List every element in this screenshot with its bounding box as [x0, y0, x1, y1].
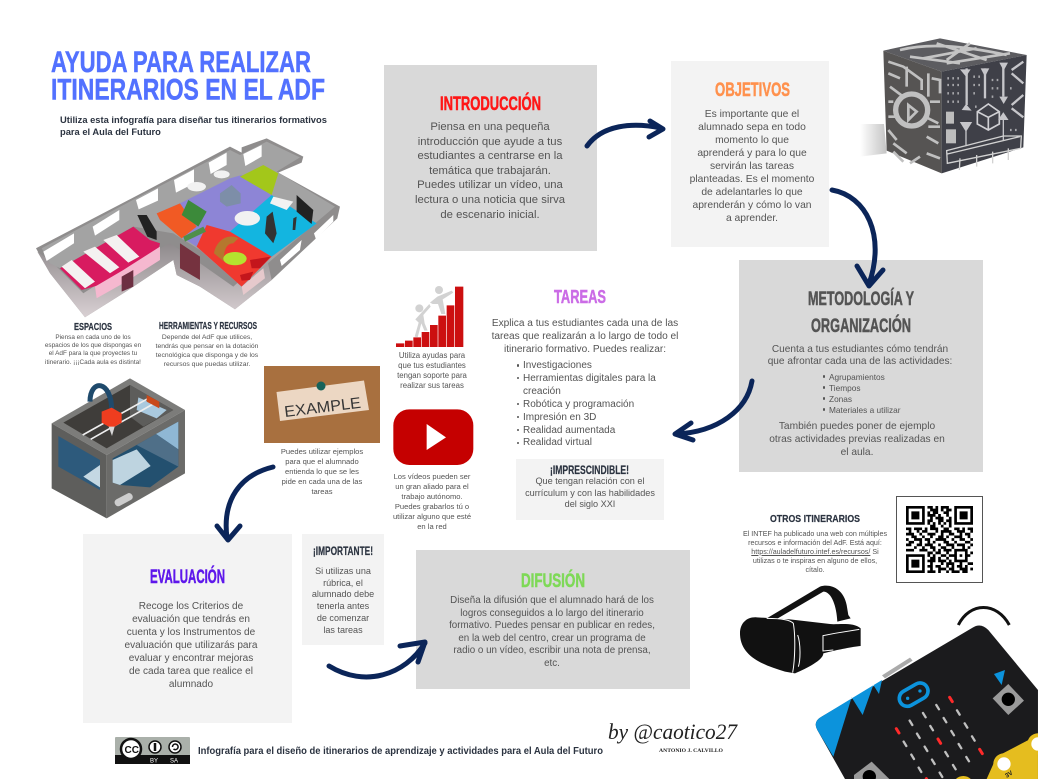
panel: introducción — [384, 65, 597, 251]
text: importante: de comenzar — [317, 613, 369, 623]
illustration: 3D printer — [52, 378, 185, 518]
text: puedes utilizar ejemplos: entienda lo que se les — [285, 467, 359, 476]
text: objetivos — [690, 108, 814, 224]
signature: by @caotico27 — [608, 719, 738, 744]
text: importante: rúbrica, el — [323, 578, 363, 588]
illustration: aula del futuro floor plan — [36, 138, 340, 317]
text: objetivos: de adelantarles lo que — [701, 187, 803, 198]
qr code — [896, 496, 982, 582]
text: tareas intro: itinerario formativo. Puedes realizar: — [504, 344, 666, 354]
text: utiliza ayudas: Utiliza ayudas para — [399, 351, 465, 360]
cc by-sa badge: SA — [170, 758, 178, 764]
cc by-sa badge: BY — [150, 758, 158, 764]
text: otros itinerarios: recursos e información del AdF. Está aquí: — [748, 539, 882, 547]
heading: metodología y organización: METODOLOGÍA Y — [808, 288, 914, 310]
heading: introducción: INTRODUCCIÓN — [440, 93, 541, 115]
text: difusión: radio o un vídeo, escribir una nota de prensa, — [453, 645, 651, 656]
text: imprescindible: Que tengan relación con el — [535, 476, 645, 486]
text: metodología ejemplo — [769, 420, 945, 458]
list: tareas: Realidad aumentada — [523, 425, 615, 436]
text: objetivos: alumnado sepa en todo — [698, 122, 806, 133]
arrow: importante to difusión — [329, 642, 425, 677]
text: difusión — [449, 595, 655, 668]
text: espacios: Piensa en cada uno de los — [55, 334, 131, 341]
cc by-sa badge: CC — [124, 745, 139, 756]
text: introducción: Piensa en una pequeña — [430, 121, 550, 133]
icon: youtube play button — [393, 409, 473, 465]
panel: importante — [302, 534, 384, 645]
text: puedes utilizar ejemplos: tareas — [311, 487, 333, 496]
image: example note on corkboard — [264, 366, 380, 443]
heading: herramientas y recursos: HERRAMIENTAS Y RECURSOS — [159, 321, 257, 332]
list: metodología: Agrupamientos — [829, 372, 885, 382]
text: introducción: lectura o una noticia que sirva — [415, 194, 565, 206]
text: otros itinerarios: https://auladelfuturo.intef.es/recursos/ Si — [751, 548, 879, 556]
heading: imprescindible: ¡IMPRESCINDIBLE! — [550, 465, 629, 477]
text: importante: las tareas — [323, 625, 363, 635]
list: metodología — [823, 372, 900, 415]
list: tareas: Realidad virtual — [523, 437, 592, 448]
text: espacios — [45, 334, 141, 366]
text: objetivos: planteadas. Es el momento — [690, 174, 814, 185]
text: evaluación: evaluar y encontrar mejoras — [129, 652, 253, 664]
text: puedes utilizar ejemplos: pide en cada una de las — [282, 477, 362, 486]
text: espacios: espacios de los que dispongas en — [45, 342, 141, 349]
list: tareas — [517, 360, 656, 448]
text: evaluación: cuenta y los Instrumentos de — [127, 626, 255, 638]
text: tareas intro: tareas que realizarán a lo largo de todo el — [492, 330, 678, 342]
text: imprescindible: del siglo XXI — [565, 499, 615, 509]
panel: imprescindible — [516, 459, 664, 520]
text: utiliza ayudas: realizar sus tareas — [400, 381, 464, 390]
subtitle: Utiliza esta infografía para diseñar tus itinerarios formativos — [60, 114, 327, 124]
text: los vídeos: en la red — [417, 522, 447, 531]
subtitle — [60, 114, 327, 137]
panel: difusión — [416, 550, 690, 689]
text: objetivos: a aprender. — [726, 213, 778, 224]
text: difusión: en la web del centro, crear un programa de — [458, 632, 646, 644]
text: los vídeos: Los vídeos pueden ser — [394, 472, 470, 481]
list: tareas: Impresión en 3D — [523, 412, 596, 423]
panel: objetivos — [671, 61, 829, 247]
list: tareas: Herramientas digitales para la — [523, 373, 656, 384]
text: introducción: introducción que ayude a tus — [418, 136, 562, 148]
text: utiliza ayudas: que tus estudiantes — [398, 361, 466, 370]
text: introducción: estudiantes a centrarse en la — [417, 150, 563, 162]
text: objetivos: aprenderán y cómo lo van — [692, 200, 812, 211]
heading: difusión: DIFUSIÓN — [521, 570, 585, 592]
title: AYUDA PARA REALIZAR — [51, 46, 311, 79]
text: evaluación: Recoge los Criterios de — [139, 600, 243, 612]
text: otros itinerarios: El INTEF ha publicado una web con múltiples — [743, 530, 887, 538]
text: introducción: de escenario inicial. — [440, 209, 540, 221]
text: imprescindible: currículum y con las habilidades — [525, 488, 655, 498]
text: difusión: Diseña la difusión que el alumnado hará de los — [450, 595, 654, 606]
text: metodología intro: que afrontar cada una de las actividades: — [768, 356, 952, 367]
text: metodología ejemplo: otras actividades previas realizadas en — [769, 434, 945, 444]
arrow: metodología to tareas — [675, 381, 752, 440]
text: herramientas y recursos — [156, 334, 258, 368]
text: los vídeos — [393, 472, 471, 531]
text: evaluación — [124, 600, 258, 690]
text: metodología intro: Cuenta a tus estudiantes cómo tendrán — [772, 344, 948, 354]
text: evaluación: evaluación que tendrás en — [132, 614, 250, 624]
text: objetivos: servirán las tareas — [710, 161, 794, 172]
text: evaluación: de cada tarea que realice el — [129, 666, 253, 676]
arrow: objetivos to metodología — [832, 190, 883, 286]
text: puedes utilizar ejemplos — [281, 447, 363, 496]
text: otros itinerarios: cítalo. — [805, 566, 825, 574]
text: metodología ejemplo: el aula. — [841, 446, 873, 458]
text: los vídeos: trabajo autónomo. — [401, 492, 463, 501]
text: herramientas y recursos: tendrás que pensar en la dotación — [156, 343, 258, 350]
text: evaluación: evaluación que utilizarás para — [125, 640, 257, 650]
panel: evaluación — [83, 534, 292, 723]
arrow: ejemplos to evaluación — [217, 467, 273, 540]
text: metodología intro — [768, 344, 952, 367]
text: otros itinerarios — [743, 530, 887, 574]
text: otros itinerarios: utilizas o te inspiras en alguno de ellos, — [753, 557, 877, 565]
text: los vídeos: utilizar alguno que esté — [393, 512, 471, 521]
heading: importante: ¡IMPORTANTE! — [313, 546, 373, 558]
text: difusión: logros conseguidos a lo largo del itinerario — [460, 608, 644, 618]
text: objetivos: Es importante que el — [705, 108, 799, 120]
subtitle: para el Aula del Futuro — [60, 127, 161, 137]
heading: evaluación: EVALUACIÓN — [150, 566, 225, 588]
heading: objetivos: OBJETIVOS — [715, 80, 790, 101]
text: puedes utilizar ejemplos: para que el alumnado — [285, 457, 359, 466]
text: evaluación: alumnado — [169, 678, 213, 690]
text: utiliza ayudas: tengan soporte para — [397, 371, 467, 380]
footer caption: Infografía para el diseño de itinerarios de aprendizaje y actividades para el Aula del Futuro — [198, 746, 603, 757]
heading: metodología y organización — [808, 288, 914, 337]
text: espacios: el AdF para la que proyectes tu — [49, 350, 137, 357]
title — [51, 46, 325, 106]
text: difusión: etc. — [544, 658, 560, 668]
text: tareas intro — [492, 318, 678, 354]
panel: metodología y organización — [739, 260, 983, 472]
list: metodología: Zonas — [829, 394, 852, 404]
signature: ANTONIO J. CALVILLO — [659, 748, 724, 754]
heading: otros itinerarios: OTROS ITINERARIOS — [770, 513, 860, 525]
illustration: VR headset — [740, 586, 861, 673]
heading: tareas: TAREAS — [554, 287, 606, 307]
heading: espacios: ESPACIOS — [74, 322, 112, 333]
list: tareas: Investigaciones — [523, 360, 592, 371]
text: objetivos: momento lo que — [715, 135, 789, 146]
text: espacios: itinerario. ¡¡¡Cada aula es distinta! — [45, 359, 141, 366]
text: los vídeos: Puedes grabarlos tú o — [395, 502, 469, 511]
list: tareas: creación — [523, 386, 561, 397]
list: tareas: Robótica y programación — [523, 399, 634, 410]
text: puedes utilizar ejemplos: Puedes utilizar ejemplos — [281, 447, 363, 456]
text: utiliza ayudas — [397, 351, 467, 390]
text: importante: tenerla antes — [317, 601, 369, 611]
illustration: merge cube — [860, 38, 1027, 173]
text: herramientas y recursos: recursos que puedas utilizar. — [164, 361, 250, 368]
text: importante: alumnado debe — [312, 589, 374, 599]
text: objetivos: aprenderá y para lo que — [697, 148, 807, 159]
text: difusión: formativo. Puedes pensar en publicar en redes, — [449, 620, 655, 631]
text: introducción — [415, 121, 565, 221]
image: example note on corkboard: EXAMPLE — [283, 395, 362, 421]
arrow: introducción to objetivos — [587, 121, 663, 146]
text: introducción: temática que trabajarán. — [429, 165, 551, 177]
list: metodología: Materiales a utilizar — [829, 405, 900, 415]
text: imprescindible — [525, 476, 655, 509]
text: los vídeos: un gran aliado para el — [395, 482, 469, 491]
heading: metodología y organización: ORGANIZACIÓN — [811, 315, 911, 337]
text: introducción: Puedes utilizar un vídeo, una — [417, 179, 563, 191]
text: importante: Si utilizas una — [315, 566, 371, 576]
illustration: red stairs with climbing figures — [396, 286, 463, 347]
title: ITINERARIOS EN EL ADF — [51, 74, 325, 106]
text: importante — [312, 566, 374, 635]
cc by-sa badge — [115, 737, 190, 764]
text: herramientas y recursos: tecnológica que disponga y de los — [156, 352, 258, 359]
text: herramientas y recursos: Depende del AdF que utilices, — [162, 334, 252, 341]
text: tareas intro: Explica a tus estudiantes cada una de las — [492, 318, 678, 328]
illustration: micro:bit board — [816, 607, 1038, 779]
list: metodología: Tiempos — [829, 383, 861, 393]
text: metodología ejemplo: También puedes poner de ejemplo — [779, 420, 935, 432]
